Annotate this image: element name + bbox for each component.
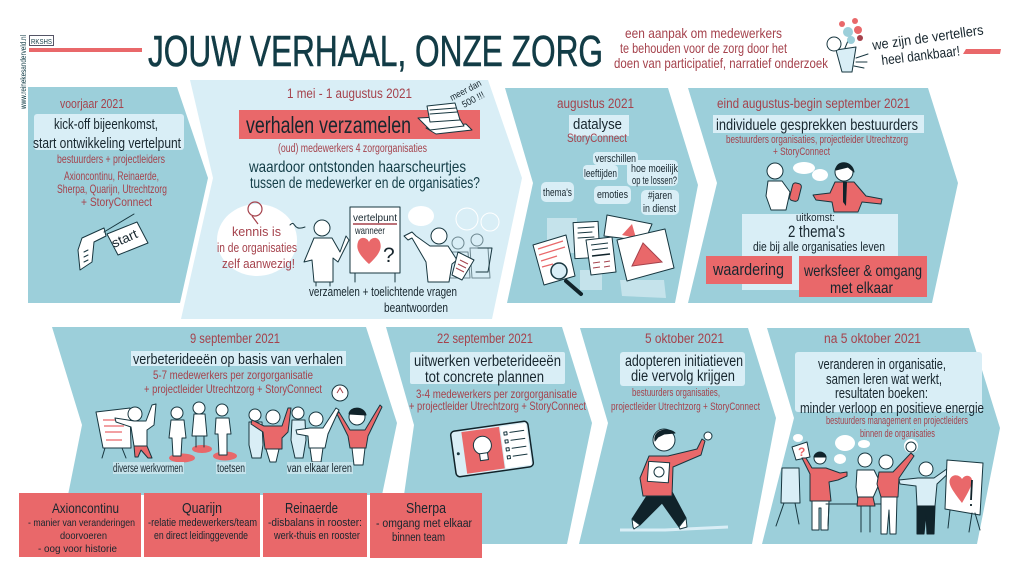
theme bubbles: verschillen xyxy=(595,153,636,165)
vertelpunt board xyxy=(350,207,400,282)
participants: + StoryConnect xyxy=(81,195,153,209)
panel: verhalen verzamelen xyxy=(181,78,522,319)
subtitle xyxy=(614,25,829,71)
box: Axioncontinu: doorvoeren xyxy=(60,530,107,542)
thank you note xyxy=(870,22,984,68)
icon: start pistol with flag: start xyxy=(109,226,140,251)
red heading banner: verhalen verzamelen xyxy=(246,112,411,138)
heading: datalyse xyxy=(573,116,622,133)
date: 5 oktober 2021 xyxy=(645,331,724,346)
heading: start ontwikkeling vertelpunt xyxy=(33,135,182,152)
figures: learning group xyxy=(249,385,382,465)
participants xyxy=(611,387,760,413)
captions: toetsen xyxy=(217,463,245,475)
vertelpunt board: vertelpunt xyxy=(353,212,397,224)
red note rule xyxy=(963,49,1001,54)
speech cloud: knowledge: zelf aanwezig! xyxy=(222,256,295,271)
figure: storyteller xyxy=(290,220,349,286)
result box: 2 thema's xyxy=(788,222,845,241)
figure: person with question sheet xyxy=(792,442,847,530)
vertelpunt board: wanneer xyxy=(354,225,385,237)
theme bubbles: thema's xyxy=(543,187,572,199)
participants: projectleider Utrechtzorg + StoryConnect xyxy=(611,401,760,413)
icon: start pistol with flag xyxy=(78,214,148,270)
note: more than 500: 500 !!! xyxy=(460,90,487,111)
participants xyxy=(409,387,587,413)
highlight box xyxy=(34,114,184,150)
participants: + projectleider Utrechtzorg + StoryConnect xyxy=(144,382,323,396)
result box: die bij alle organisaties leven xyxy=(753,239,885,254)
date: 22 september 2021 xyxy=(437,331,533,346)
speech cloud: knowledge: kennis is xyxy=(232,224,281,239)
theme bubbles: leeftijden xyxy=(584,168,617,180)
table xyxy=(826,504,886,526)
panel: uitwerken verbeterideeen xyxy=(386,327,592,544)
captions xyxy=(113,462,353,475)
participants: 5-7 medewerkers per zorgorganisatie xyxy=(153,368,313,382)
box: Reinaerde: werk-thuis en rooster xyxy=(273,530,360,542)
figure: woman thinking xyxy=(856,453,880,532)
panel: voorjaar 2021 xyxy=(28,87,208,303)
speech bubbles xyxy=(793,434,918,464)
theme bubbles: in dienst xyxy=(643,203,676,215)
heading xyxy=(795,352,984,417)
theme: werksfeer: werksfeer & omgang xyxy=(803,263,922,280)
subtitle: doen van participatief, narratief onderzoek xyxy=(614,55,829,71)
question: waardoor ontstonden haarscheurtjes xyxy=(248,159,466,176)
question xyxy=(248,159,480,192)
right flipchart with heart xyxy=(945,460,983,532)
white speech bubble xyxy=(408,206,434,226)
box: Reinaerde xyxy=(263,493,367,557)
thank you note: we zijn de vertellers xyxy=(870,22,984,53)
heading xyxy=(620,352,745,386)
title: JOUW VERHAAL, ONZE ZORG xyxy=(148,27,603,76)
theme bubbles: emoties xyxy=(597,189,628,201)
participants: 3-4 medewerkers per zorgorganisatie xyxy=(416,387,577,401)
theme: werksfeer xyxy=(799,256,927,297)
theme: werksfeer: met elkaar xyxy=(830,280,894,297)
participants: StoryConnect xyxy=(567,131,628,145)
vertelpunt board: ? xyxy=(383,244,395,267)
documents xyxy=(533,215,674,285)
subtitle: te behouden voor de zorg door het xyxy=(620,40,787,56)
panel: verbeterideeen xyxy=(52,327,397,495)
participants: + projectleider Utrechtzorg + StoryConnect xyxy=(409,399,587,413)
participants: bestuurders + projectleiders xyxy=(57,152,165,166)
theme: waardering: waardering xyxy=(712,260,784,279)
date: 9 september 2021 xyxy=(190,331,280,346)
heading: resultaten boeken: xyxy=(835,385,928,402)
speech cloud: knowledge xyxy=(217,202,297,276)
heading: verbeterideeën op basis van verhalen xyxy=(133,352,343,368)
caption xyxy=(309,284,457,315)
box: Reinaerde: Reinaerde xyxy=(285,500,338,517)
caption: verzamelen + toelichtende vragen xyxy=(309,284,457,299)
heading: kick-off bijeenkomst, xyxy=(54,116,158,133)
icon: magnifier xyxy=(551,263,581,294)
thank you note: heel dankbaar! xyxy=(880,42,961,68)
box: Axioncontinu: - manier van veranderingen xyxy=(28,517,135,529)
theme: waardering xyxy=(706,256,792,284)
heading xyxy=(33,116,182,152)
date: 1 mei - 1 augustus 2021 xyxy=(287,86,412,101)
figure: walking manager xyxy=(632,429,712,529)
figure: man with raised idea xyxy=(877,442,916,534)
speech cloud: knowledge: in de organisaties xyxy=(217,240,297,255)
faint background pages xyxy=(547,218,666,298)
caption: beantwoorden xyxy=(384,300,448,315)
date: augustus 2021 xyxy=(557,96,634,111)
red title rule xyxy=(29,48,142,52)
theme bubbles xyxy=(541,152,679,215)
participants: Sherpa, Quarijn, Utrechtzorg xyxy=(57,182,167,196)
participants: (oud) medewerkers 4 zorgorganisaties xyxy=(278,143,427,155)
participants xyxy=(57,152,167,209)
boxes: organisation themes xyxy=(19,493,482,558)
speech bubbles xyxy=(793,162,828,181)
heading: uitwerken verbeterideeën xyxy=(414,353,561,370)
figure: person with question sheet: ? xyxy=(798,445,805,459)
panel: datalyse xyxy=(505,88,698,303)
box: Sherpa xyxy=(370,493,482,558)
participants: binnen de organisaties xyxy=(860,428,935,440)
participants xyxy=(826,415,968,440)
box: Quarijn: -relatie medewerkers/team xyxy=(148,517,257,529)
figure: person in blue xyxy=(899,462,953,534)
heading: individuele gesprekken bestuurders xyxy=(716,117,918,134)
heading: adopteren initiatieven xyxy=(625,353,743,370)
subtitle: een aanpak om medewerkers xyxy=(625,25,782,41)
panel: veranderen in organisatie xyxy=(762,328,1000,544)
box: Sherpa: binnen team xyxy=(392,532,445,544)
logo box: RKSHS xyxy=(31,39,52,46)
captions: diverse werkvormen xyxy=(113,463,183,475)
result box: uitkomst: xyxy=(796,212,835,224)
note: more than 500 xyxy=(448,78,487,111)
header xyxy=(19,18,1001,110)
participants xyxy=(726,134,908,158)
heading: veranderen in organisatie, xyxy=(818,356,946,373)
heading: die vervolg krijgen xyxy=(631,368,735,385)
website credit: www.reinekesanderveld.nl xyxy=(19,35,28,110)
ground line xyxy=(620,527,728,530)
box: Axioncontinu xyxy=(19,493,141,557)
participants: + StoryConnect xyxy=(773,146,830,158)
logo box xyxy=(30,36,54,46)
note: more than 500: meer dan xyxy=(448,78,483,104)
date: na 5 oktober 2021 xyxy=(824,331,921,346)
box: Axioncontinu: Axioncontinu xyxy=(52,500,119,516)
figure: flipchart and presenter xyxy=(96,404,156,458)
box: Quarijn: Quarijn xyxy=(182,500,222,517)
theme bubbles: hoe moeilijk xyxy=(631,163,678,175)
figure: woman xyxy=(766,163,802,210)
panel: individuele gesprekken xyxy=(688,88,958,303)
figures: test group xyxy=(169,402,237,462)
panel: adopteren initiatieven xyxy=(579,328,776,544)
theme bubbles: #jaren xyxy=(648,190,672,202)
figure: group with interviewer xyxy=(404,208,499,282)
heading xyxy=(410,352,565,386)
participants: bestuurders organisaties, xyxy=(632,387,720,399)
heading: tot concrete plannen xyxy=(425,369,544,386)
heading: samen leren wat werkt, xyxy=(826,371,942,388)
question: tussen de medewerker en de organisaties? xyxy=(250,175,480,192)
result box xyxy=(742,212,898,290)
left flipchart xyxy=(776,468,800,526)
box: Axioncontinu: - oog voor historie xyxy=(38,543,117,555)
date: voorjaar 2021 xyxy=(60,96,124,111)
date: eind augustus-begin september 2021 xyxy=(717,96,910,111)
box: Quarijn: en direct leidinggevende xyxy=(154,530,248,542)
icon: hands with bouquet xyxy=(827,18,868,72)
box: Reinaerde: -disbalans in rooster: xyxy=(268,517,362,529)
icon: stack of stories xyxy=(418,103,472,134)
theme bubbles: op te lossen? xyxy=(632,175,677,187)
figure: man in red suit xyxy=(813,163,882,212)
participants: Axioncontinu, Reinaerde, xyxy=(64,169,159,183)
box: Sherpa: Sherpa xyxy=(406,500,447,517)
participants: bestuurders organisaties, projectleider Utrechtzorg xyxy=(726,134,908,146)
captions: van elkaar leren xyxy=(287,463,352,475)
participants xyxy=(144,368,323,396)
box: Quarijn xyxy=(144,493,260,557)
icon: tablet with plan xyxy=(450,421,534,477)
box: Sherpa: - omgang met elkaar xyxy=(376,518,472,530)
